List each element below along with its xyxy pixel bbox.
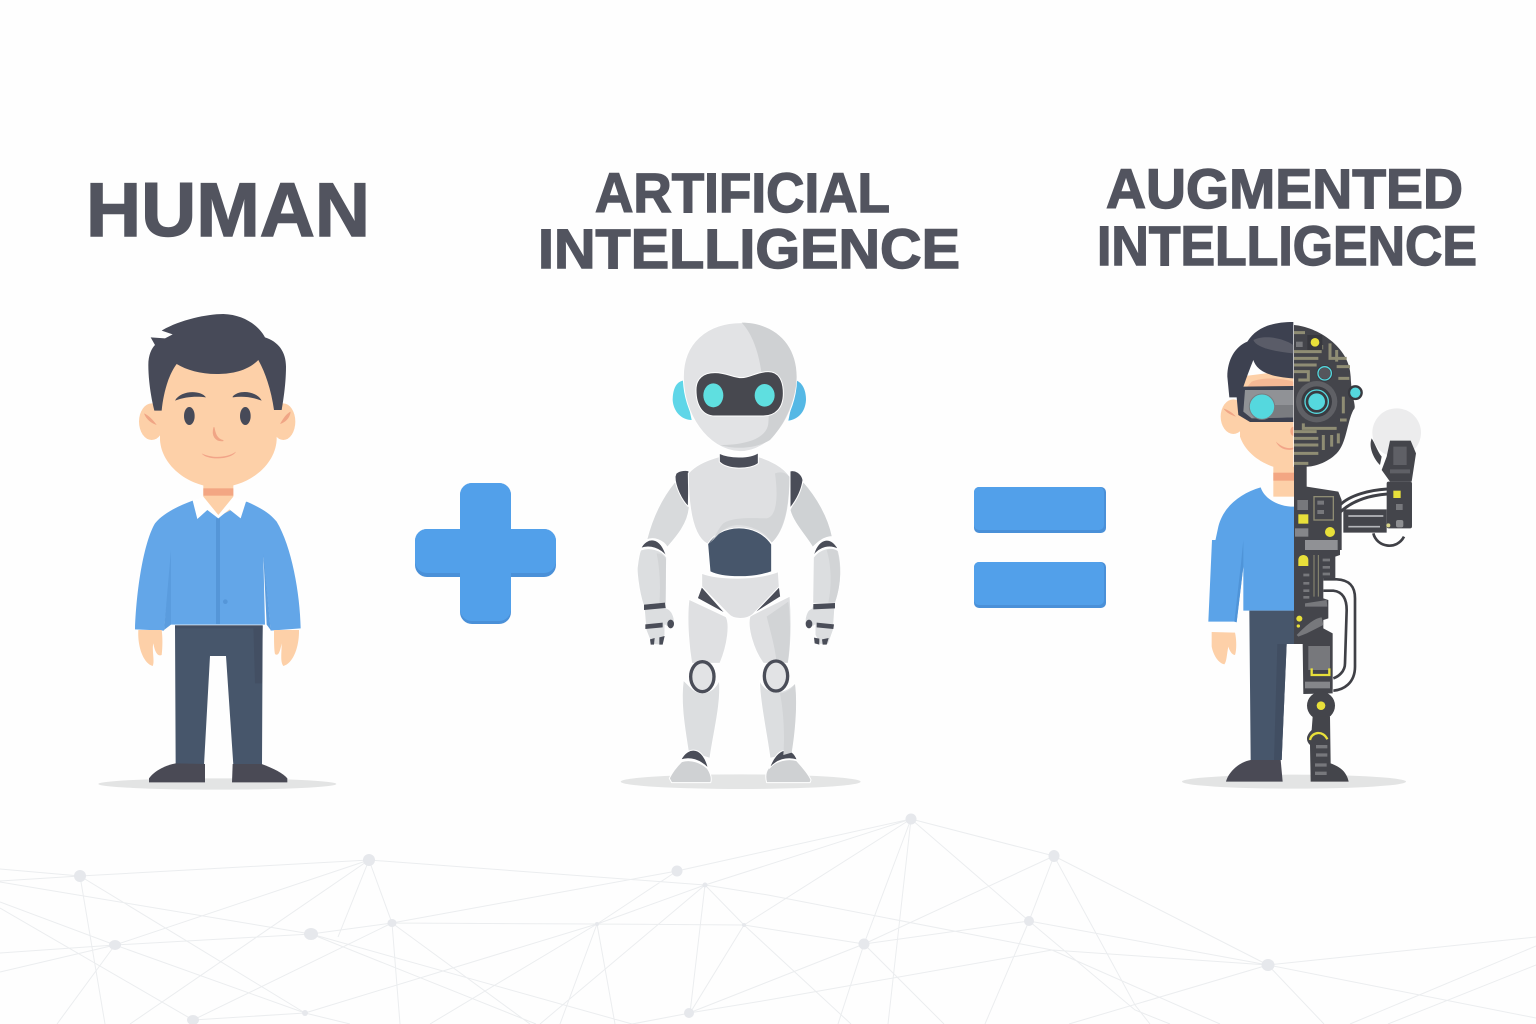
cyborg upper body xyxy=(1213,322,1421,550)
plus sign xyxy=(415,483,556,624)
title: artificial intelligence xyxy=(538,161,960,280)
cyborg lower body xyxy=(1182,540,1406,789)
robot figure xyxy=(621,323,861,789)
title: artificial intelligence: INTELLIGENCE xyxy=(538,217,960,280)
background network pattern xyxy=(0,814,1536,1024)
equals sign xyxy=(974,487,1106,608)
title: augmented intelligence: INTELLIGENCE xyxy=(1097,214,1477,277)
title: augmented intelligence xyxy=(1097,157,1477,277)
human figure xyxy=(98,314,336,790)
title: augmented intelligence: AUGMENTED xyxy=(1106,157,1463,220)
augmented human cyborg figure xyxy=(1182,322,1421,789)
title: human: HUMAN xyxy=(86,168,370,253)
title: artificial intelligence: ARTIFICIAL xyxy=(595,161,890,224)
